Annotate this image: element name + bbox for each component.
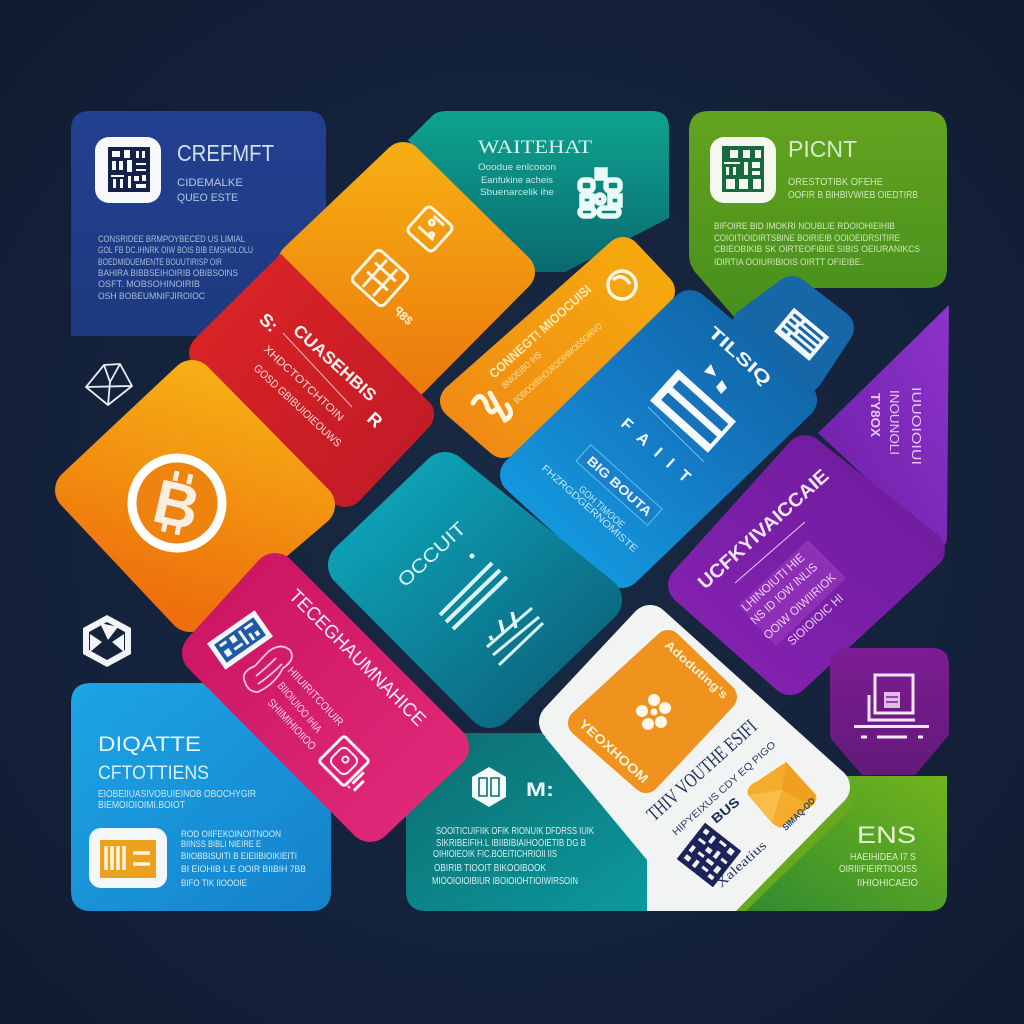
red card icon right: R [363, 408, 386, 432]
teal bottom text: SOOITICUIFIIK OFIK RIONUIK DFDRSS IUIK [436, 826, 594, 837]
white card label: BUS [708, 794, 743, 826]
purple triangle shape [818, 305, 949, 546]
icon: bitcoin coin: B [147, 467, 206, 544]
teal bottom card shape [406, 733, 660, 911]
icon: orange card chip top [406, 205, 454, 253]
green bottom text: HAEIHIDEA I7 S [850, 852, 916, 863]
purple card info box [738, 540, 846, 646]
teal center heading: OCCUIT [394, 518, 471, 592]
orange card label: ꟼ8$ [391, 304, 416, 328]
light blue body text: ROD OIIFEKOINOITNOON [181, 829, 281, 840]
panel: bitcoin card [77, 382, 313, 610]
panel: small purple tile [830, 648, 949, 775]
light blue subheading: CFTOTTIENS [98, 763, 209, 784]
bitcoin card shape [77, 382, 313, 610]
green card body text: COIOITIOIDIRTSBINE BOIRIEIB OOIOEIDRSITIRE [714, 233, 900, 244]
light blue body text: BIFO TIK IIOOOIE [181, 878, 247, 889]
green card body text: CBIEOBIKIB SK OIRTEOFIBIIE SIBIS OEIURANIKCS [714, 244, 920, 255]
small orange card text: BNIOEIBO IHS [500, 350, 543, 390]
white card rounded top [559, 625, 830, 830]
blue card shape [71, 111, 326, 336]
icon: white hexagon cube [83, 615, 131, 667]
light blue heading: DIQATTE [98, 733, 201, 756]
small orange card heading: CONNEGT! MIOOCUISI [486, 282, 594, 381]
big blue subheading: FAIIT [617, 415, 697, 490]
blue card body text: BOEDMIDUEMENTE BOUUTIRISP OIR [98, 257, 222, 268]
pink card text [265, 665, 345, 753]
green card body text: IDIRTIA OOIURIBIOIS OIRTT OFIEIBE.. [714, 257, 865, 268]
teal top text: Eanfukine acheis [481, 175, 553, 186]
icon: striped document [650, 369, 736, 453]
red card shape [209, 253, 414, 487]
teal top card shape [408, 111, 669, 272]
purple card divider [735, 522, 805, 583]
teal bottom text: OBIRIB TIOOIT BIKOOIBOOK [434, 863, 546, 874]
green bottom text: OIRIIIFIEIRTIOOISS [839, 864, 917, 875]
icon: arrow markers [704, 364, 727, 394]
teal top text: Sbuenarcelik ihe [480, 187, 554, 198]
icon: marks [490, 612, 516, 640]
green card body text: BIFOIRE BID IMOKRI NOUBLIE RDOIOHIEIHIB [714, 221, 895, 232]
panel: purple triangle [818, 305, 949, 546]
teal bottom text: SIKRIBEIFIH.L IBIIBIBIAIHOOIETIB DG B [436, 838, 586, 849]
white card qr code [677, 823, 741, 887]
red card icon left: S: [255, 309, 282, 336]
red card text: GOSD GBIBUIOIEOUWS [251, 362, 343, 450]
blue card heading: CREFMFT [177, 140, 274, 166]
panel: teal bottom [406, 733, 660, 911]
green card subtitle: OOFIR B BIHBIVWIEB OIEDTIRB [788, 189, 918, 201]
light blue text: EIOBEIIUASIVOBUIEINOB OBOCHYGIR [98, 789, 256, 800]
light blue body text: BIINSS BIBLI NIEIRE E [181, 839, 261, 850]
purple card text: NS ID IOW INLIS [748, 560, 820, 627]
small purple tile shape [830, 648, 949, 775]
light blue body text: BI EIOHIB L E OOIR BIIBIH 7BB [181, 864, 306, 875]
big blue card shape [520, 310, 797, 568]
pink card text: HIIUIRITCOIUIR [285, 665, 345, 729]
icon: wire diamond [86, 364, 132, 405]
icon: ledger document [774, 308, 829, 361]
panel: teal center card [352, 476, 598, 704]
small orange card shape [458, 255, 657, 440]
purple card text [739, 550, 846, 648]
panel: blue top left [71, 111, 326, 336]
icon: orange envelope [748, 762, 816, 828]
icon: dot [470, 554, 474, 558]
green card subtitle [788, 176, 918, 201]
teal top text: Ooodue enlcooon [478, 162, 556, 173]
green card subtitle: ORESTOTIBK OFEHE [788, 176, 883, 188]
small orange card text [500, 321, 604, 405]
teal top heading: WAITEHAT [478, 137, 592, 158]
green card body text [714, 221, 920, 268]
purple triangle text: INOUNOLI [887, 390, 902, 455]
icon: stripes lower [487, 608, 543, 665]
light blue body text [181, 829, 306, 889]
small blue tab shape [750, 294, 836, 375]
white card footer text: Xaleatius [713, 838, 769, 890]
icon: flower [636, 694, 671, 730]
red card divider [283, 333, 352, 407]
red card text: XHDCTOTCHTOIN [261, 343, 346, 424]
purple triangle text: IUUOIOIUI [909, 387, 924, 465]
icon: book hexagon [472, 767, 506, 807]
purple card text: LHINOIUTI HIE [739, 550, 807, 614]
pink card heading: TECEGHAUMNAHICE [284, 586, 429, 731]
blue card body text: OSH BOBEUMNIFJIROIOC [98, 291, 205, 302]
green bottom card shape [735, 776, 947, 911]
icon: orange tile [89, 828, 167, 888]
orange inner label: YEOXHOOM [576, 716, 651, 786]
green card shape [689, 111, 947, 322]
light blue body text: BIIOBBISUITI B EIEIIBIOIKIEITI [181, 851, 297, 862]
red card heading: CUASEHBIS [289, 321, 380, 405]
icon: squiggle [473, 393, 511, 420]
big blue divider [648, 407, 704, 462]
white card small text: SIMAQ-OO [780, 796, 817, 832]
orange card shape [298, 162, 515, 378]
blue card subtitle [177, 177, 243, 204]
blue card body text: BAHIRA BIBBSEIHOIRIB OBIBSOINS [98, 268, 238, 279]
green bottom text [839, 852, 918, 889]
panel: green top right [689, 111, 947, 322]
big blue text: GOH TIMOOE [576, 484, 627, 531]
panel: big blue card [520, 310, 797, 568]
panel: orange credit card [298, 162, 515, 378]
panel: pink card [204, 575, 447, 820]
light blue card shape [71, 683, 331, 911]
icon: swirl [608, 271, 636, 299]
icon: orange card chip bottom [350, 248, 410, 308]
green card heading: PICNT [788, 136, 857, 162]
light blue text: BIEMOIOIOIMI.BOIOT [98, 800, 185, 811]
orange inner heading: Adoduting's [662, 638, 731, 702]
blue card subtitle: CIDEMALKE [177, 177, 243, 189]
purple card shape [688, 455, 925, 675]
blue card body text: OSFT. MOBSOHINOIRIB [98, 279, 200, 290]
pink card shape [204, 575, 447, 820]
blue card subtitle: QUEO ESTE [177, 192, 238, 204]
panel: purple card [688, 455, 925, 675]
panel: small orange card [458, 255, 657, 440]
green bottom text: IIHIOHICAEIO [857, 878, 918, 889]
icon: outlined app symbol [319, 736, 377, 794]
teal bottom text: MIOOIOIOIBIUR IBOIOIOHTIOIWIRSOIN [432, 876, 578, 887]
white card heading: THIV VOUTHE ESIFI [643, 716, 761, 826]
purple card text: SIOIOIOIC HI [785, 591, 846, 648]
panel: teal top [408, 111, 669, 272]
teal bottom heading: M: [526, 780, 554, 801]
icon: white qr tile [95, 137, 161, 203]
icon: document stand [854, 675, 929, 737]
panel: white card [545, 625, 844, 911]
blue card body text: CONSRIDEE BRMPOYBECED US LIMIAL [98, 234, 245, 245]
green bottom heading: ENS [857, 822, 916, 849]
orange inner square [582, 644, 723, 779]
panel: small blue tab [750, 294, 836, 375]
panel: red card [209, 253, 414, 487]
light blue text [98, 789, 256, 811]
pink card text: BIIOIUIOO IHIA [275, 680, 324, 736]
blue card body text: GOL FB DC.IHNRK OIW BOIS BIB EMSHOLOLU [98, 245, 253, 256]
small orange card text: BOBIOOIIBIHOUROIOIHIMOISSOIRIVO [512, 321, 604, 405]
purple card heading: UCFKYIVAICCAIE [694, 466, 833, 594]
purple triangle text [868, 387, 924, 465]
orange inner panel [576, 638, 731, 786]
pink card text: SHIIMIHIOIIOO [265, 697, 318, 753]
white card lower body [545, 650, 844, 911]
big blue heading: TILSIQ [704, 323, 775, 389]
icon: bitcoin coin [132, 458, 222, 548]
teal center card shape [352, 476, 598, 704]
icon: green qr tile [710, 137, 776, 203]
blue card body text [98, 234, 253, 302]
teal bottom text [432, 826, 594, 887]
icon: blue qr tag [207, 610, 273, 670]
purple card text: OOIW OIWIIRIOK [761, 570, 838, 642]
icon: stripes upper [440, 563, 507, 629]
icon: teal qr code [580, 170, 620, 216]
white card text: HIPYEIXUS CDY EQ PIGO [671, 740, 779, 838]
teal top text [478, 162, 556, 198]
icon: script scribble [244, 646, 292, 692]
big blue text: FHZRGDGERNOMISTE [539, 463, 640, 555]
big blue outlined label: BIG BOUTA [584, 453, 655, 520]
purple triangle text: TY8OX [868, 393, 883, 437]
teal bottom text: OIHIOIEOIK FIC.BOEITICHRIOII IIS [433, 849, 557, 860]
panel: green bottom right [730, 776, 947, 911]
panel: light blue bottom left [71, 683, 331, 911]
green lip under white card [730, 790, 856, 911]
big blue outlined label [576, 445, 662, 525]
